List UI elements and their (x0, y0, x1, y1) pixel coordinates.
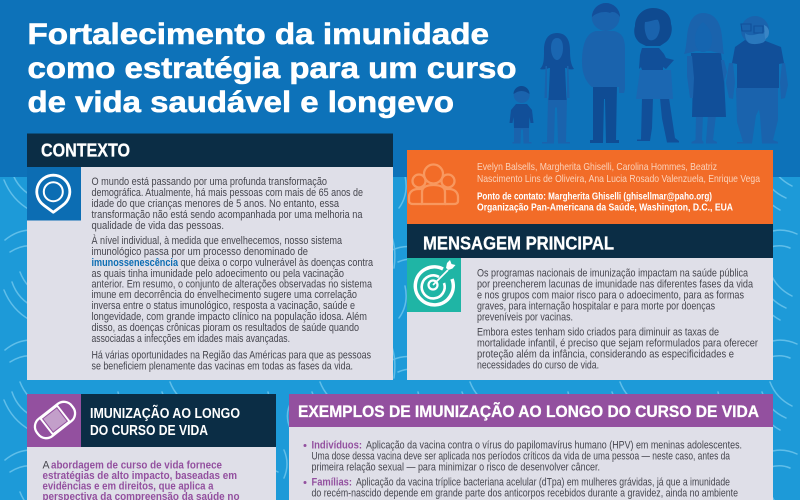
list: famílias: Aplicação da vacina tríplice bacteriana acelular (dTpa) em mulheres grávidas, já que a imunidade (356, 476, 730, 488)
text block: contexto paragraphs: imune em decorrência do envelhecimento sugere uma correlação (92, 289, 357, 301)
text block: abordagem: abordagem de curso de vida fornece (51, 460, 222, 472)
list: indivíduos: Indivíduos: (312, 440, 362, 452)
background: lower light blue patterned area (0, 177, 800, 500)
text block: mensagem paragraphs: graves, para internação hospitalar e para morte por doenças (477, 300, 715, 312)
text block: contexto paragraphs: transformação não está sendo acompanhada por uma melhoria na (92, 209, 363, 221)
text block: contexto paragraphs: qualidade de vida das pessoas. (92, 220, 224, 232)
panel: imunização ao longo do curso de vida (27, 394, 276, 500)
text block: mensagem paragraphs (477, 268, 758, 372)
text block: contexto paragraphs: idade do que crianças menores de 5 anos. No entanto, essa (92, 198, 339, 210)
heading: mensagem principal: MENSAGEM PRINCIPAL (423, 234, 614, 254)
text block: abordagem (42, 460, 240, 500)
text block: contact (477, 192, 733, 214)
text block: contexto paragraphs: as quais tinha imunidade pelo adoecimento ou pela vacinação (92, 268, 344, 280)
title: como estratégia para um curso (28, 52, 516, 85)
text block: contexto paragraphs: longevidade, com grande impacto clínico na população idosa. Além (92, 311, 367, 323)
title: de vida saudável e longevo (28, 86, 454, 119)
panel: mensagem principal (407, 224, 773, 380)
title (28, 18, 516, 119)
text block: contexto paragraphs: associadas a infecções em idades mais avançadas. (92, 333, 290, 345)
panel: exemplos de imunização (289, 394, 773, 500)
heading: contexto: CONTEXTO (41, 140, 130, 160)
text block: mensagem paragraphs: necessidades do curso de vida. (477, 360, 599, 372)
text block: authors (477, 162, 760, 185)
heading: imunização ao longo: IMUNIZAÇÃO AO LONGO (90, 404, 240, 422)
text block: contexto paragraphs: demográfica. Atualmente, há mais pessoas com mais de 65 anos de (92, 187, 363, 199)
title: Fortalecimento da imunidade (28, 18, 489, 51)
text block: contexto paragraphs: Há várias oportunidades na Região das Américas para que as pessoas (92, 350, 371, 362)
figure: woman with long hair (684, 13, 727, 144)
icon: group of people (409, 164, 458, 204)
text block: abordagem: evidências e em direitos, que aplica a (42, 480, 214, 492)
text block: mensagem paragraphs: e nos grupos com maior risco para o adoecimento, para as formas (477, 290, 744, 302)
text block: authors: Evelyn Balsells, Margherita Ghiselli, Carolina Hommes, Beatriz (477, 162, 717, 173)
figure: curly haired woman (634, 8, 679, 142)
heading: imunização ao longo: DO CURSO DE VIDA (90, 423, 208, 439)
text block: abordagem: A (42, 460, 50, 472)
illustration: family silhouettes (510, 3, 788, 144)
figure: child (510, 86, 534, 144)
background: upper blue band (0, 0, 800, 177)
list: famílias (304, 476, 738, 500)
text block: mensagem paragraphs: Embora estes tenham sido criados para diminuir as taxas de (477, 326, 719, 338)
heading: exemplos: EXEMPLOS DE IMUNIZAÇÃO AO LONGO DO CURSO DE VIDA (298, 401, 759, 421)
text block: contexto paragraphs: imunológico passa por um processo denominado de (92, 246, 308, 258)
text block: contexto paragraphs: inversa entre o status imunológico, resposta a vacinação, saúde e (92, 300, 355, 312)
text block: contact: Organização Pan-Americana da Saúde, Washington, D.C., EUA (477, 202, 733, 214)
list: famílias: Famílias: (312, 476, 352, 488)
icon: bandage (27, 394, 81, 447)
figure: girl with long hair (540, 33, 574, 144)
text block: contexto paragraphs: que deixa o corpo vulnerável às doenças contra (180, 257, 373, 269)
figure: elderly man with glasses (726, 16, 788, 144)
text block: contexto paragraphs: disso, as doenças crônicas pioram os resultados de saúde quando (92, 322, 359, 334)
icon: location pin (27, 167, 81, 220)
text block: abordagem: estratégias de alto impacto, baseadas em (42, 470, 237, 482)
text block: mensagem paragraphs: proteção além da infância, considerando as especificidades e (477, 348, 734, 360)
list: indivíduos: primeira relação sexual — para minimizar o risco de desenvolver câncer. (312, 462, 600, 474)
text block: contexto paragraphs: anterior. Em resumo, o conjunto de alterações observadas no sistema (92, 278, 372, 290)
heading: imunização ao longo (90, 404, 240, 439)
icon: target with arrow (407, 258, 461, 312)
text block: contexto paragraphs: À nível individual, à medida que envelhecemos, nosso sistema (92, 234, 342, 247)
text block: contexto paragraphs: se beneficiem plenamente das vacinas em todas as fases da vida. (92, 360, 353, 372)
list: indivíduos (304, 440, 742, 474)
text block: contexto paragraphs (92, 176, 373, 372)
text block: mensagem paragraphs: por preencherem lacunas de imunidade nas diferentes fases da vida (477, 278, 753, 290)
list: indivíduos: Aplicação da vacina contra o vírus do papilomavírus humano (HPV) em meninas adolescentes. (366, 440, 742, 452)
text block: mensagem paragraphs: preveníveis por vacinas. (477, 312, 573, 324)
text block: contexto paragraphs: O mundo está passando por uma profunda transformação (92, 176, 327, 188)
text block: contact: Ponto de contato: Margherita Ghiselli (ghisellmar@paho.org) (477, 192, 712, 202)
panel: contexto (27, 134, 393, 380)
text block: mensagem paragraphs: Os programas nacionais de imunização impactam na saúde pública (477, 268, 748, 280)
text block: mensagem paragraphs: mortalidade infantil, é preciso que sejam reformulados para oferecer (477, 338, 758, 350)
figure: tall man (582, 3, 625, 143)
panel: authors (407, 150, 773, 224)
text block: contexto paragraphs: imunossenescência (92, 257, 178, 269)
